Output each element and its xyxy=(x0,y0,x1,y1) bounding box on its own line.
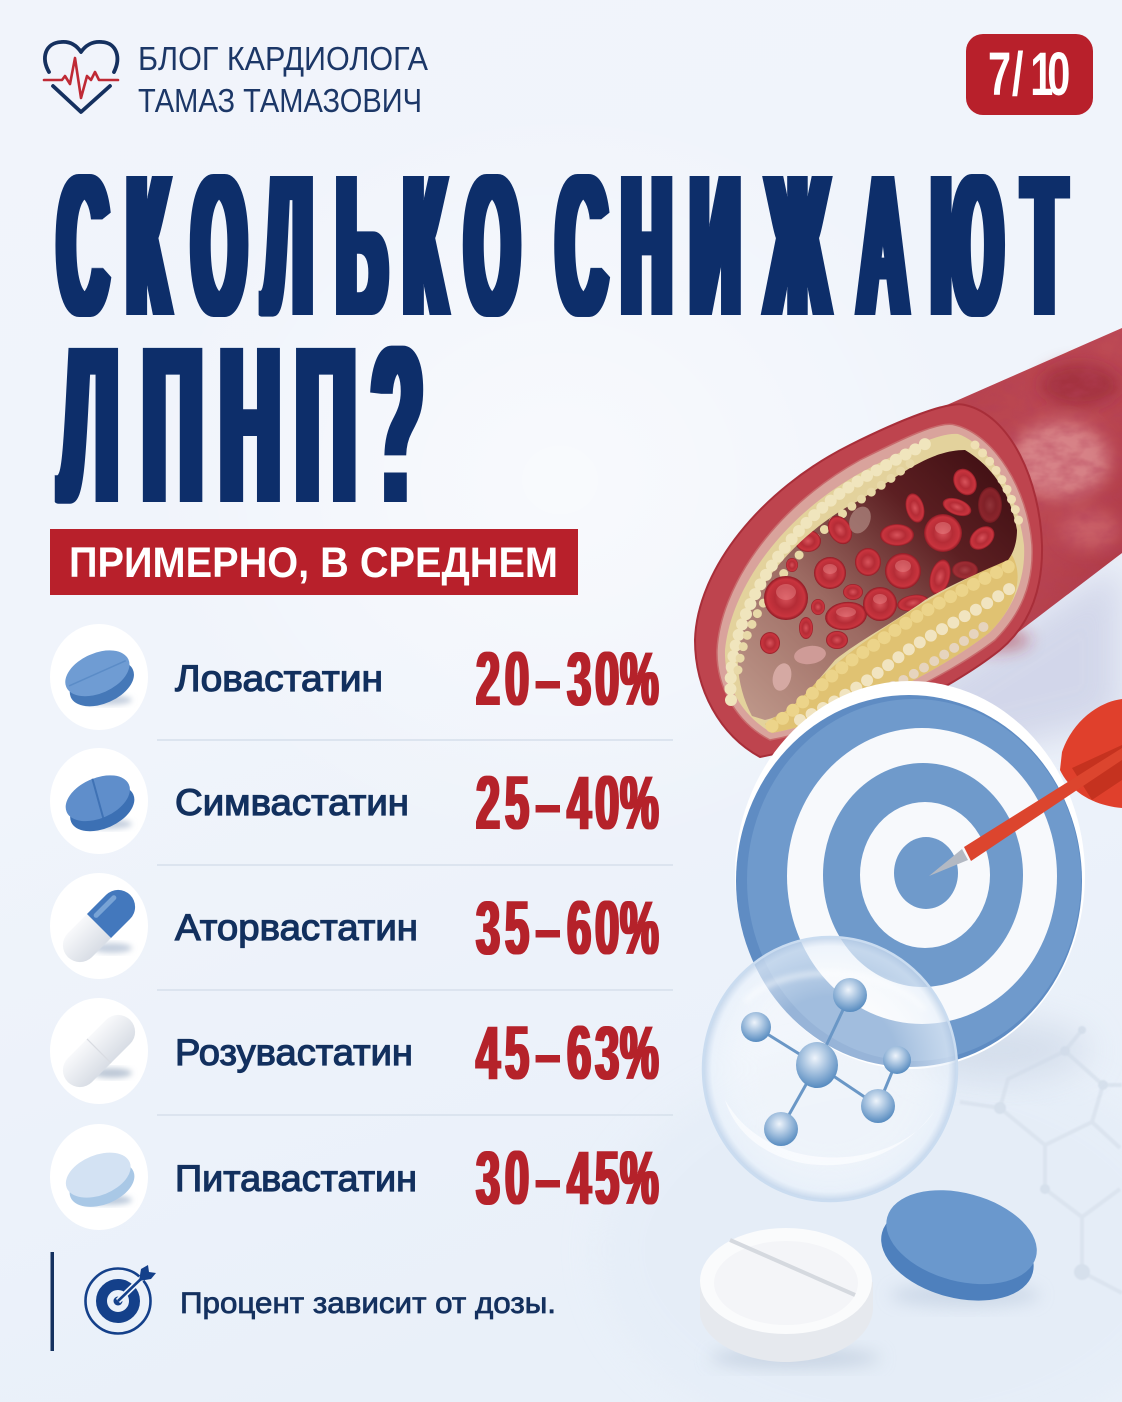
outer vessel wall xyxy=(695,404,1042,757)
icon: pale blue round tablet xyxy=(50,1124,148,1230)
illustration: blue tablet xyxy=(870,1175,1048,1316)
illustration: artery with plaque xyxy=(695,328,1122,770)
row: Аторвастатин xyxy=(50,873,659,979)
plaque beads xyxy=(730,444,1021,726)
drug name: Аторвастатин xyxy=(175,907,418,948)
icon: blue and white capsule xyxy=(50,873,148,979)
row: Ловастатин xyxy=(50,624,659,730)
percent range: 25–40% xyxy=(476,761,659,846)
drug name: Розувастатин xyxy=(175,1032,413,1073)
molecule xyxy=(741,978,911,1146)
artery shadow xyxy=(790,560,1122,770)
title: ЛПНП? xyxy=(60,299,422,550)
red blood cells xyxy=(760,464,1002,693)
percent range: 30–45% xyxy=(476,1136,659,1221)
illustration: glass bubble with molecule xyxy=(703,937,957,1201)
icon: white capsule xyxy=(50,998,148,1104)
subtitle label: ПРИМЕРНО, В СРЕДНЕМ xyxy=(69,539,558,587)
bubble xyxy=(703,937,957,1201)
plaque lower fill xyxy=(765,555,1018,733)
row: Розувастатин xyxy=(50,998,659,1104)
brand name: БЛОГ КАРДИОЛОГА xyxy=(138,41,429,78)
illustration: target with dart xyxy=(735,681,1122,1078)
plaque layer xyxy=(725,434,1024,733)
inner vessel wall xyxy=(717,424,1032,740)
brand name xyxy=(138,41,429,120)
lumen xyxy=(738,450,1017,720)
drug name: Ловастатин xyxy=(175,658,383,699)
title: СКОЛЬКО СНИЖАЮТ xyxy=(58,132,1065,358)
row: Питавастатин xyxy=(50,1124,659,1230)
target shadow xyxy=(910,1022,1090,1078)
brand name: ТАМАЗ ТАМАЗОВИЧ xyxy=(138,83,422,120)
icon: blue oval tablet xyxy=(50,624,148,730)
subtitle label xyxy=(50,529,578,595)
target board xyxy=(735,681,1085,1069)
drug name: Симвастатин xyxy=(175,782,409,823)
artery body xyxy=(940,328,1122,688)
illustration: molecular hexagon network xyxy=(960,1026,1122,1293)
icon: heart with pulse xyxy=(44,42,118,112)
percent range: 35–60% xyxy=(476,886,659,971)
title xyxy=(58,132,1065,550)
page badge: 7/10 xyxy=(988,41,1070,109)
percent range: 45–63% xyxy=(476,1011,659,1096)
percent range: 20–30% xyxy=(476,637,659,722)
dart xyxy=(929,699,1122,876)
brand logo xyxy=(44,41,429,120)
illustration: white scored tablet xyxy=(700,1228,880,1368)
row: Симвастатин xyxy=(50,748,659,854)
footnote text: Процент зависит от дозы. xyxy=(180,1287,556,1320)
footnote xyxy=(50,1252,556,1351)
icon: blue scored tablet xyxy=(50,748,148,854)
icon: target with arrow xyxy=(86,1265,156,1334)
page badge xyxy=(966,34,1093,115)
drug name: Питавастатин xyxy=(175,1158,417,1199)
